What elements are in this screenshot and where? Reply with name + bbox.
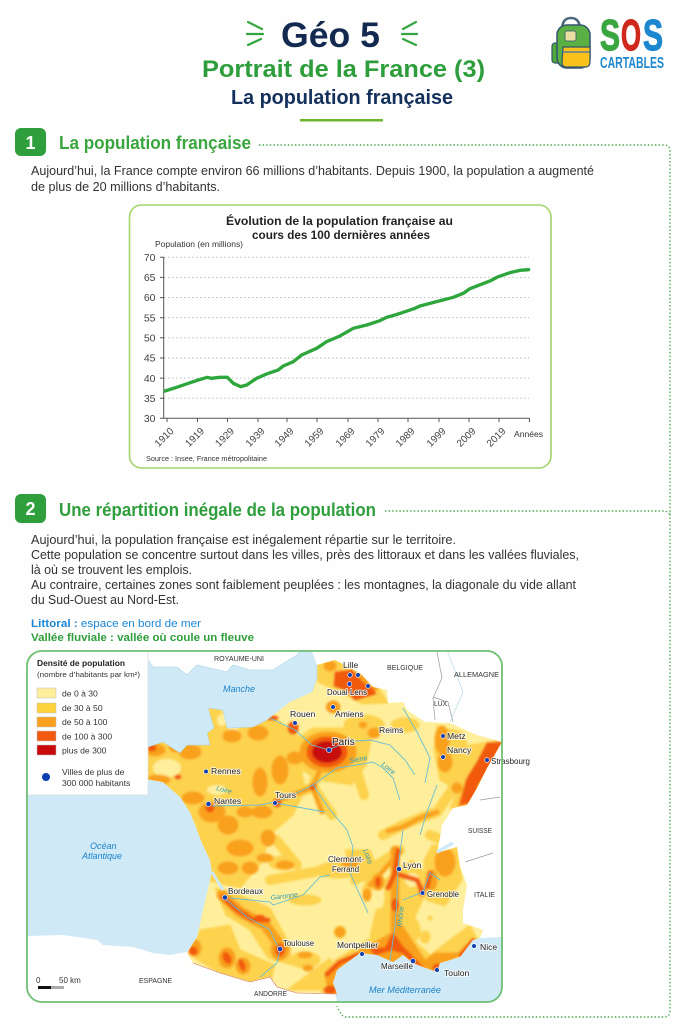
city labels: Rouen [290, 709, 316, 719]
y axis labels: 50 [144, 332, 156, 344]
rivers [212, 708, 453, 977]
text block: section 2: là où se trouvent les emplois. [31, 563, 192, 577]
city labels: Bordeaux [228, 886, 264, 896]
chart title: Évolution de la population française au [226, 215, 453, 228]
text block: section 2 [31, 533, 579, 607]
dotted connector section 2 [385, 511, 670, 515]
x axis labels: 1949 [273, 426, 297, 449]
y axis labels: 55 [144, 312, 156, 324]
scale bar [36, 976, 81, 989]
x axis labels: 2019 [485, 426, 509, 449]
panel: section 2 header [15, 494, 376, 523]
map frame [27, 651, 502, 1002]
y axis labels: 30 [144, 413, 156, 425]
city labels [211, 660, 530, 978]
badge 1 [15, 128, 46, 156]
river labels: Seine [349, 755, 368, 765]
x axis labels: 1939 [244, 426, 268, 449]
sea and country labels: Mer Méditerranée [369, 985, 441, 995]
city labels: Lyon [403, 860, 422, 870]
sea and country labels: ITALIE [474, 890, 495, 899]
icon: sparks left of title [247, 22, 263, 45]
text block: section 2: Cette population se concentre surtout dans les villes, près des littoraux et dans les vallées fluviales, [31, 548, 579, 562]
sea and country labels: ESPAGNE [139, 976, 172, 985]
legend title: Densité de population [37, 658, 125, 668]
city labels: Nancy [447, 745, 472, 755]
city labels: Marseille [381, 961, 413, 971]
city labels: Rennes [211, 766, 241, 776]
map legend [27, 651, 148, 795]
text block: section 1 [31, 164, 594, 194]
logo: SOS Cartables: S [643, 11, 663, 60]
subtitle: Portrait de la France: Portrait de la France (3) [202, 56, 485, 83]
legend city marker [42, 773, 50, 781]
sea and country labels: Océan [90, 841, 117, 851]
x axis labels: 1999 [425, 426, 449, 449]
x axis labels: 1919 [183, 426, 207, 449]
definitions: littoral and vallée fluviale: Vallée fluviale : vallée où coule un fleuve [31, 632, 254, 644]
y axis labels: 35 [144, 393, 156, 405]
city labels: Nantes [214, 796, 241, 806]
city labels: Strasbourg [491, 756, 530, 766]
title: Géo 5 [281, 16, 380, 55]
map legend: (nombre d’habitants par km²) [37, 670, 140, 679]
sea and country labels: LUX. [434, 699, 449, 708]
sea and country labels [81, 654, 499, 998]
x axis labels: 1910 [153, 426, 177, 449]
river labels: Garonne [270, 892, 298, 902]
city labels: Ferrand [332, 864, 359, 874]
panel: section 2 header: 2 [25, 499, 36, 519]
chart title [226, 215, 453, 242]
subtitle: La population française: La population française [231, 87, 453, 109]
x axis labels: 1989 [394, 426, 418, 449]
legend labels: plus de 300 [62, 746, 107, 756]
sea and country labels: BELGIQUE [387, 663, 423, 672]
population curve [165, 270, 529, 391]
city labels: Amiens [335, 709, 364, 719]
heading 2: Une répartition inégale de la population [59, 500, 376, 520]
y axis labels: 60 [144, 292, 156, 304]
x axis labels [153, 426, 509, 449]
sea and country labels: Manche [223, 684, 255, 694]
city dots [204, 673, 489, 972]
legend swatches [37, 688, 56, 755]
y axis labels: 70 [144, 252, 156, 264]
definitions: littoral and vallée fluviale: Littoral : espace en bord de mer [31, 618, 201, 630]
city labels: Tours [275, 790, 296, 800]
sea and country labels: Atlantique [81, 851, 122, 861]
city labels: Lille [343, 660, 359, 670]
legend labels: de 30 à 50 [62, 703, 103, 713]
panel: population density map [27, 650, 530, 1002]
city labels: Nice [480, 942, 497, 952]
panel: population line chart [130, 205, 551, 468]
river labels: Loire [361, 848, 373, 865]
x axis labels: 2009 [455, 426, 479, 449]
river labels [215, 755, 406, 927]
city labels: Paris [332, 737, 355, 748]
x axis labels: 1979 [364, 426, 388, 449]
badge 2 [15, 494, 46, 523]
logo: SOS Cartables: S [600, 11, 620, 60]
text block: section 1: de plus de 20 millions d’habitants. [31, 180, 220, 194]
city labels: Clermont- [328, 854, 364, 864]
y axis labels: 40 [144, 373, 156, 385]
icon: sparks right of title [402, 22, 417, 45]
y axis labels: 65 [144, 272, 156, 284]
text block: section 2: Aujourd’hui, la population française est inégalement répartie sur le territoire. [31, 533, 456, 547]
city labels: Montpellier [337, 940, 378, 950]
river labels: Loire [380, 761, 396, 777]
legend labels: de 0 à 30 [62, 688, 98, 698]
scale bar: 0 [36, 976, 41, 985]
sea and country labels: ANDORRE [254, 989, 287, 998]
legend labels: de 50 à 100 [62, 717, 108, 727]
legend labels: de 100 à 300 [62, 732, 112, 742]
city labels: Toulon [444, 968, 470, 978]
y axis labels: 45 [144, 352, 156, 364]
river labels: Rhône [397, 906, 406, 927]
chart title: cours des 100 dernières années [252, 230, 430, 242]
scale bar: 50 km [59, 976, 81, 985]
logo: SOS Cartables: O [621, 11, 641, 60]
sea and country labels: ROYAUME-UNI [214, 654, 264, 663]
x axis title: Années [514, 430, 543, 439]
river labels: Loire [215, 785, 232, 796]
city labels: Reims [379, 725, 403, 735]
x axis labels: 1959 [303, 426, 327, 449]
text block: section 2: Au contraire, certaines zones sont faiblement peuplées : les montagnes, la diagonale du vide allant [31, 578, 577, 592]
map legend: 300 000 habitants [62, 778, 130, 788]
map legend: Villes de plus de [62, 767, 125, 777]
city labels: Toulouse [283, 938, 314, 948]
x axis labels: 1969 [334, 426, 358, 449]
heading 1: La population française [59, 133, 251, 153]
legend labels [62, 688, 112, 756]
sea and country labels: SUISSE [468, 826, 492, 835]
sea and country labels: ALLEMAGNE [454, 670, 499, 679]
y axis title: Population (en millions) [155, 240, 243, 249]
text block: section 1: Aujourd’hui, la France compte environ 66 millions d’habitants. Depuis 1900, la population a augmenté [31, 164, 594, 178]
icon: backpack [552, 18, 590, 68]
panel: section 1 header [15, 128, 251, 156]
text block: section 2: du Sud-Ouest au Nord-Est. [31, 593, 179, 607]
x axis labels: 1929 [213, 426, 237, 449]
dotted connector along the right side [259, 145, 670, 1017]
logo: SOS Cartables [552, 11, 664, 72]
definitions: littoral and vallée fluviale [31, 618, 254, 644]
chart source: Source : Insee, France métropolitaine [146, 456, 267, 463]
France density [148, 660, 502, 994]
title underline [300, 119, 383, 122]
panel: section 1 header: 1 [25, 133, 36, 153]
y axis labels [144, 252, 156, 425]
city labels: Douai-Lens [327, 687, 367, 697]
city labels: Metz [447, 731, 466, 741]
city labels: Grenoble [427, 889, 459, 899]
